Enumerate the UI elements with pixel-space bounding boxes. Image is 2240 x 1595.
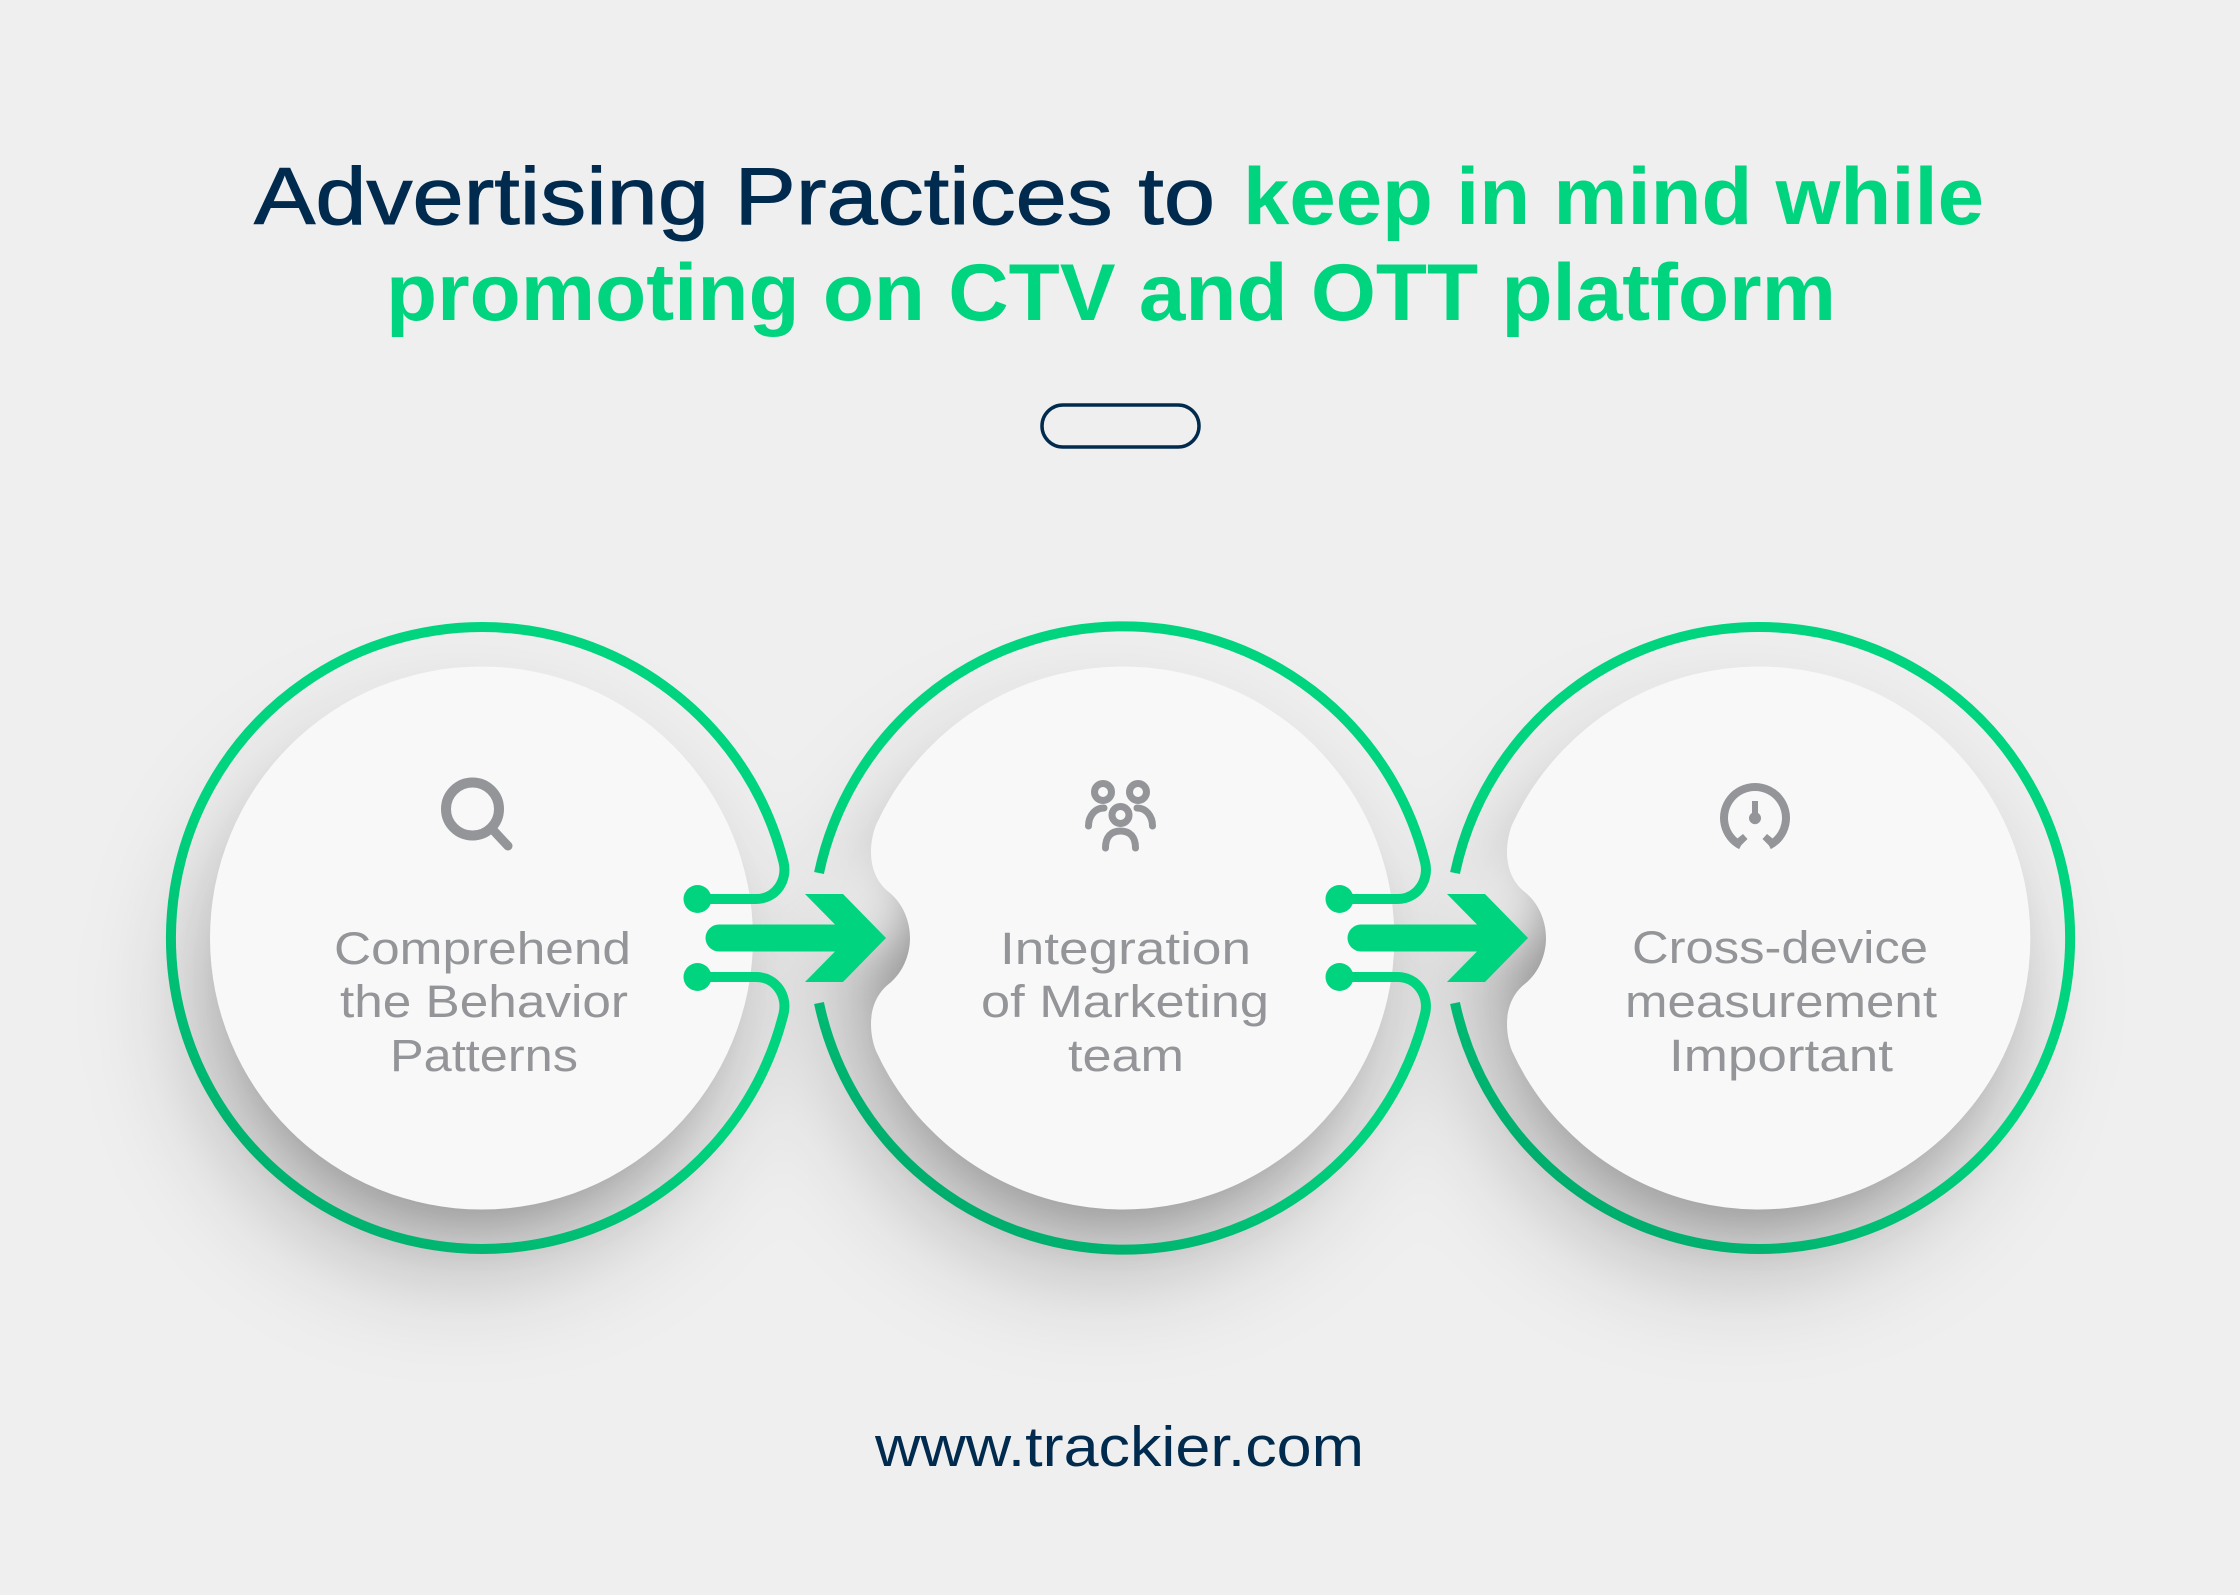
connector dots 2 <box>1326 885 1354 991</box>
label 1: Comprehend <box>334 923 631 974</box>
decorative pill <box>1042 405 1199 447</box>
arrow 2 <box>1348 894 1528 982</box>
label 2: of Marketing <box>981 976 1269 1027</box>
footer url: www.trackier.com <box>874 1415 1364 1479</box>
ring 3 <box>1455 627 2070 1249</box>
ring with connectors 2 <box>819 626 1426 1250</box>
light glow near arrows <box>812 855 1548 955</box>
label 1: the Behavior <box>340 976 628 1027</box>
label 2 <box>981 923 1269 1081</box>
ring with connectors 1 <box>171 627 784 1249</box>
panel: cross-device measurement important <box>1455 627 2070 1249</box>
label 3: Cross-device <box>1632 922 1928 973</box>
label 1: Patterns <box>390 1030 578 1081</box>
label 2: team <box>1068 1030 1184 1081</box>
label 3: Important <box>1669 1030 1894 1081</box>
title: promoting on CTV and OTT platform <box>386 248 1836 338</box>
label 3 <box>1625 922 1938 1081</box>
title: keep in mind while <box>1243 152 1984 242</box>
tight shadows behind circles <box>245 740 1994 1210</box>
connector dots 1 <box>684 885 712 991</box>
panel: integration of marketing team <box>819 626 1528 1250</box>
label 2: Integration <box>1000 923 1251 974</box>
wide soft shadows behind circles <box>200 738 2002 1262</box>
icon: magnifying glass <box>446 782 508 846</box>
title: Advertising Practices to <box>254 152 1215 242</box>
label 3: measurement <box>1625 976 1938 1027</box>
icon: gauge <box>1724 787 1786 848</box>
title <box>254 152 1984 338</box>
panel: comprehend the behavior patterns <box>171 627 886 1249</box>
arrow 1 <box>706 894 886 982</box>
icon: people <box>1088 784 1152 848</box>
label 1 <box>334 923 631 1081</box>
